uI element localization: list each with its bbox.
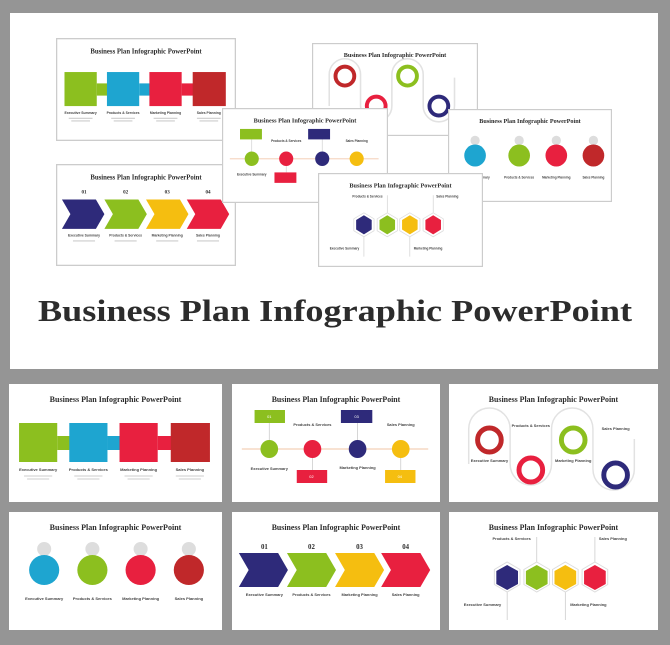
slide grid 4: numbered circles: Business Plan Infographic PowerPoint: [50, 523, 182, 532]
slide: numbered circles (top): Executive Summary: [460, 175, 490, 179]
slide grid 2: timeline: Marketing Planning: [340, 465, 376, 470]
slide: hexagons (top): Executive Summary: [330, 246, 359, 250]
slide: squares with arrows (top): Products & Services: [107, 111, 140, 115]
panel: top hero: [10, 13, 658, 369]
slide grid 5: chevrons: Marketing Planning: [341, 592, 378, 597]
slide grid 6: hexagons: Products & Services: [492, 536, 532, 541]
slide: hexagons (top): Marketing Planning: [414, 246, 442, 250]
slide: chevrons (top): 03: [165, 189, 170, 195]
slide grid 1: squares: Sales Planning: [176, 467, 205, 472]
slide grid 4: numbered circles: Executive Summary: [25, 596, 64, 601]
slide grid 3: S-curve: Products & Services: [512, 423, 551, 428]
slide: hexagons (top): [318, 173, 483, 267]
slide grid 4: numbered circles: Products & Services: [73, 596, 113, 601]
slide grid 5: chevrons: Products & Services: [292, 592, 331, 597]
slide: timeline (top): Products & Services: [271, 139, 302, 143]
slide: chevrons (top): Sales Planning: [196, 234, 220, 238]
slide grid 4: numbered circles: Marketing Planning: [122, 596, 160, 601]
slide grid 2: timeline: Products & Services: [293, 422, 332, 427]
slide: squares with arrows (top): Executive Summary: [65, 111, 97, 115]
slide grid 5: chevrons: [232, 512, 440, 630]
slide grid 4: numbered circles: Sales Planning: [175, 596, 204, 601]
slide: squares with arrows (top): Business Plan Infographic PowerPoint: [90, 49, 202, 56]
slide grid 2: timeline: Business Plan Infographic PowerPoint: [272, 395, 401, 404]
slide grid 4: numbered circles: [9, 512, 222, 630]
slide grid 2: timeline: 03: [354, 414, 360, 419]
slide grid 5: chevrons: 02: [308, 544, 315, 551]
slide grid 1: squares: Marketing Planning: [120, 467, 158, 472]
slide grid 1: squares: Products & Services: [69, 467, 109, 472]
slide: hexagons (top): Products & Services: [352, 195, 383, 199]
slide grid 2: timeline: 01: [267, 414, 271, 419]
slide grid 2: timeline: 04: [398, 474, 403, 479]
slide: S-curve rings (top): Business Plan Infographic PowerPoint: [344, 52, 447, 59]
slide: timeline (top): Sales Planning: [346, 139, 368, 143]
slide: chevrons (top): 04: [205, 189, 211, 195]
slide: chevrons (top): 02: [123, 189, 129, 195]
slide: numbered circles (top): Sales Planning: [582, 175, 604, 179]
slide grid 2: timeline: 02: [309, 474, 314, 479]
slide grid 6: hexagons: Executive Summary: [464, 602, 502, 607]
slide: squares with arrows (top): Sales Planning: [197, 111, 221, 115]
slide grid 3: S-curve: Executive Summary: [471, 458, 509, 463]
slide grid 6: hexagons: Business Plan Infographic PowerPoint: [489, 523, 619, 532]
slide grid 6: hexagons: [449, 512, 658, 630]
slide: timeline (top): [222, 108, 388, 203]
slide grid 2: timeline: Executive Summary: [251, 466, 289, 471]
slide grid 3: S-curve: Sales Planning: [602, 426, 630, 431]
slide grid 1: squares: [9, 384, 222, 502]
slide: chevrons (top): Products & Services: [109, 234, 142, 238]
slide grid 2: timeline: [232, 384, 440, 502]
slide: squares with arrows (top): [56, 38, 236, 141]
slide grid 6: hexagons: Sales Planning: [599, 536, 627, 541]
slide grid 3: S-curve: [449, 384, 658, 502]
slide: hexagons (top): Business Plan Infographic PowerPoint: [349, 182, 452, 189]
slide: numbered circles (top): Products & Services: [504, 175, 534, 179]
slide grid 3: S-curve: Marketing Planning: [555, 458, 592, 463]
slide: S-curve rings (top): [312, 43, 478, 136]
slide grid 3: S-curve: Business Plan Infographic PowerPoint: [489, 395, 619, 404]
slide grid 6: hexagons: Marketing Planning: [570, 602, 607, 607]
slide grid 2: timeline: Sales Planning: [387, 422, 415, 427]
slide grid 5: chevrons: Sales Planning: [392, 592, 420, 597]
slide grid 1: squares: Business Plan Infographic PowerPoint: [50, 395, 182, 404]
slide: chevrons (top): Business Plan Infographic PowerPoint: [90, 175, 202, 182]
slide grid 5: chevrons: Business Plan Infographic PowerPoint: [272, 523, 401, 532]
slide: numbered circles (top): Marketing Planning: [542, 175, 571, 179]
slide grid 5: chevrons: 01: [261, 544, 268, 551]
title: Business Plan Infographic PowerPoint: [38, 293, 633, 328]
slide: chevrons (top): Marketing Planning: [152, 234, 183, 238]
slide: squares with arrows (top): Marketing Planning: [150, 111, 181, 115]
slide: numbered circles (top): Business Plan Infographic PowerPoint: [479, 118, 582, 125]
slide: timeline (top): Executive Summary: [237, 173, 267, 177]
slide grid 5: chevrons: Executive Summary: [246, 592, 284, 597]
slide grid 1: squares: Executive Summary: [19, 467, 58, 472]
slide: chevrons (top): 01: [81, 189, 87, 195]
slide: numbered circles (top): [448, 109, 612, 202]
slide grid 5: chevrons: 04: [402, 544, 410, 551]
slide: chevrons (top): Executive Summary: [68, 234, 100, 238]
slide grid 5: chevrons: 03: [356, 544, 364, 551]
slide: chevrons (top): [56, 164, 236, 266]
slide: hexagons (top): Sales Planning: [436, 195, 458, 199]
slide: timeline (top): Business Plan Infographic PowerPoint: [254, 117, 357, 125]
